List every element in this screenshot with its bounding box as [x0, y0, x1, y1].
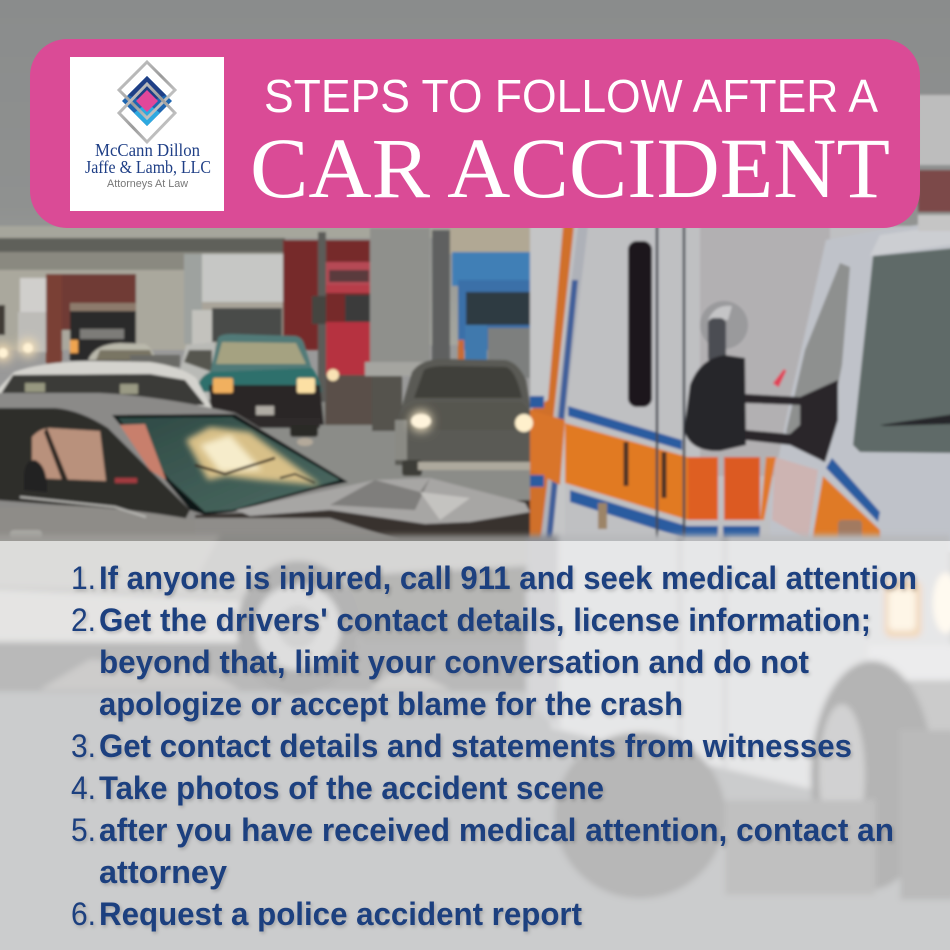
white sedan — [0, 361, 212, 410]
logo firm name: McCann Dillon — [95, 140, 200, 160]
step 6: 6. — [71, 896, 96, 932]
wrecked car wheel — [236, 560, 360, 696]
step 5: attorney — [99, 854, 227, 890]
grey trailer — [365, 228, 435, 431]
ambulance front bumper — [868, 645, 950, 679]
numbered steps list — [71, 560, 917, 932]
ambulance lower body — [527, 535, 950, 800]
headlight glows on highway — [0, 339, 533, 446]
red roof light behind banner — [918, 170, 950, 212]
road surface — [0, 400, 535, 545]
step 2 — [71, 602, 871, 722]
translucent white text panel — [0, 541, 950, 950]
road — [0, 690, 950, 950]
small door handles — [624, 442, 628, 486]
step 2: apologize or accept blame for the crash — [99, 686, 683, 722]
distant red truck — [46, 274, 136, 364]
blue semi truck — [432, 230, 532, 378]
step 2: beyond that, limit your conversation and do not — [99, 644, 809, 680]
ambulance rear wheel — [554, 731, 726, 899]
teal pickup truck — [197, 334, 324, 437]
step 2: 2. — [71, 602, 96, 638]
wrecked car side and fender — [0, 535, 530, 692]
white box truck — [184, 254, 286, 345]
logo firm name — [85, 140, 211, 177]
heading: steps to follow: STEPS TO FOLLOW AFTER A — [264, 70, 878, 122]
ambulance blue stripes — [568, 406, 682, 450]
ambulance mirror — [684, 301, 838, 462]
step 4: Take photos of the accident scene — [99, 770, 604, 806]
law firm logo card — [70, 57, 224, 211]
background photo: rainy highway crash scene — [0, 0, 950, 552]
step 5: 5. — [71, 812, 96, 848]
rear door seams — [657, 226, 684, 545]
step 3: Get contact details and statements from witnesses — [99, 728, 852, 764]
wrecked silver car — [0, 393, 530, 545]
distant white truck — [0, 278, 47, 352]
ambulance vertical stripe — [530, 226, 574, 552]
step 4: 4. — [71, 770, 96, 806]
ambulance headlights — [884, 580, 922, 638]
sky — [0, 0, 950, 345]
overpass — [0, 226, 535, 350]
step 5 — [71, 812, 894, 890]
ambulance cab — [760, 220, 950, 552]
dark sedan — [395, 359, 534, 476]
ambulance front wheel — [810, 660, 934, 890]
logo tagline: Attorneys At Law — [107, 178, 188, 190]
step 5: after you have received medical attention, contact an — [99, 812, 894, 848]
step 6: Request a police accident report — [99, 896, 582, 932]
red semi truck — [283, 232, 375, 425]
tan building behind blue truck — [450, 226, 535, 254]
logo firm name: Jaffe & Lamb, LLC — [85, 157, 211, 177]
heading: car accident: CAR ACCIDENT — [250, 120, 890, 216]
logo mark: nested diamonds — [119, 62, 175, 142]
step 1: 1. — [71, 560, 96, 596]
ambulance side window — [628, 241, 652, 407]
pink title banner — [30, 39, 920, 228]
step 3: 3. — [71, 728, 96, 764]
step 2: Get the drivers' contact details, license information; — [99, 602, 871, 638]
ambulance orange band — [565, 423, 688, 520]
lower scene beneath the list panel — [0, 535, 950, 950]
ambulance body — [530, 226, 950, 552]
pale car behind pickup — [88, 342, 215, 400]
step 1: If anyone is injured, call 911 and seek medical attention — [99, 560, 917, 596]
